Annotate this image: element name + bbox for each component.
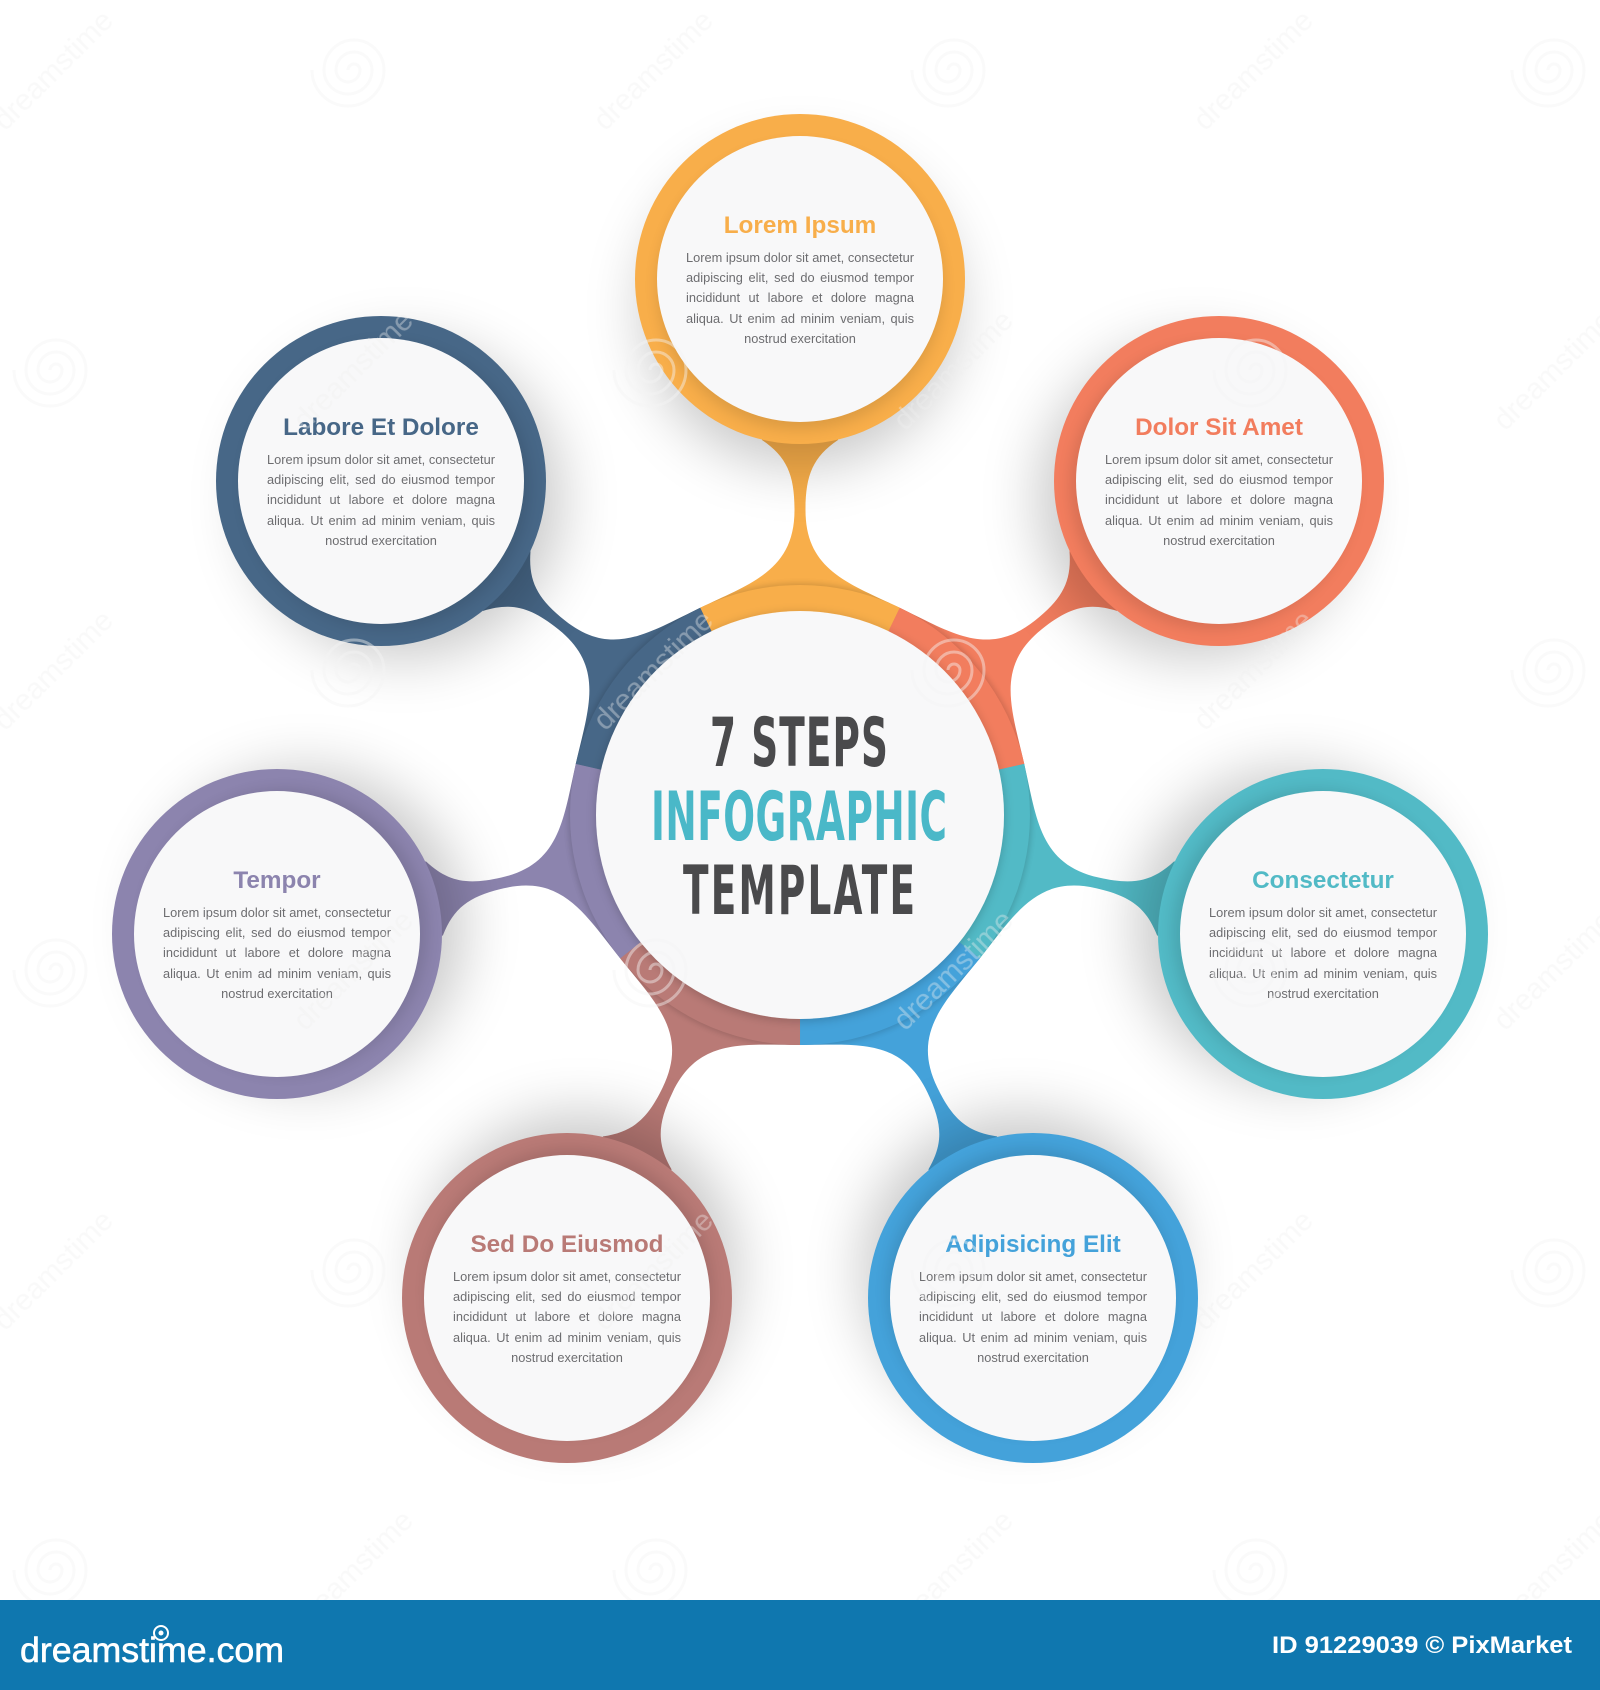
panel: Dolor Sit Amet [1054, 316, 1384, 646]
connector: blue [710, 772, 1085, 1264]
panel: Tempor [112, 769, 442, 1099]
panel: Sed Do Eiusmod [402, 1133, 732, 1463]
panel: Lorem Ipsum [635, 114, 965, 444]
watermark overlay: dreamstime [287, 904, 420, 1037]
text block: aliqua. Ut enim ad minim veniam, quis [267, 513, 495, 528]
text block: nostrud exercitation [1163, 533, 1275, 548]
text block: aliqua. Ut enim ad minim veniam, quis [453, 1330, 681, 1345]
text block [1209, 905, 1437, 1001]
text block: Lorem ipsum dolor sit amet, consectetur [267, 452, 495, 467]
heading: Labore Et Dolore [283, 414, 479, 440]
text block: adipiscing elit, sed do eiusmod tempor [267, 472, 495, 487]
watermark overlay: dreamstime [887, 1504, 1020, 1637]
watermark overlay: dreamstime [587, 4, 720, 137]
text block: adipiscing elit, sed do eiusmod tempor [163, 925, 391, 940]
text block: Lorem ipsum dolor sit amet, consectetur [919, 1269, 1147, 1284]
watermark overlay: dreamstime [587, 604, 720, 737]
heading: Tempor [233, 866, 321, 894]
text block: incididunt ut labore et dolore magna [267, 492, 495, 507]
watermark overlay: dreamstime [287, 304, 420, 437]
heading: Dolor Sit Amet [1135, 414, 1303, 440]
text block: nostrud exercitation [977, 1350, 1089, 1365]
text block [163, 905, 391, 1001]
text block: aliqua. Ut enim ad minim veniam, quis [1209, 966, 1437, 981]
text block: Lorem ipsum dolor sit amet, consectetur [453, 1269, 681, 1284]
title: 7 steps infographic template: 7 STEPS [710, 703, 888, 782]
watermark overlay: dreamstime [587, 1204, 720, 1337]
text block: adipiscing elit, sed do eiusmod tempor [453, 1289, 681, 1304]
connector: coral [738, 456, 1214, 893]
connector: rose brown [515, 772, 890, 1264]
text block: aliqua. Ut enim ad minim veniam, quis [686, 311, 914, 326]
footer logo: dreamstime.com [20, 1631, 284, 1670]
watermark overlay: dreamstime [1187, 1204, 1320, 1337]
text block: incididunt ut labore et dolore magna [919, 1309, 1147, 1324]
radial diagram: connectors and central hub [425, 440, 1175, 1170]
footer credit: ID 91229039 © PixMarket [1272, 1632, 1572, 1659]
text block: incididunt ut labore et dolore magna [453, 1309, 681, 1324]
panel: Adipisicing Elit [868, 1133, 1198, 1463]
text block [267, 452, 495, 548]
text block: incididunt ut labore et dolore magna [686, 290, 914, 305]
watermark overlay: dreamstime [1187, 604, 1320, 737]
connector: orange [700, 365, 900, 815]
text block: incididunt ut labore et dolore magna [1209, 945, 1437, 960]
heading: Sed Do Eiusmod [470, 1230, 664, 1258]
text block: Lorem ipsum dolor sit amet, consectetur [163, 905, 391, 920]
text block [686, 250, 914, 346]
central hub disc [596, 611, 1004, 1019]
text block [1105, 452, 1333, 548]
text block: incididunt ut labore et dolore magna [1105, 492, 1333, 507]
text block: incididunt ut labore et dolore magna [163, 945, 391, 960]
text block: Lorem ipsum dolor sit amet, consectetur [686, 250, 914, 265]
text block: nostrud exercitation [221, 986, 333, 1001]
text block: Lorem ipsum dolor sit amet, consectetur [1105, 452, 1333, 467]
text block: nostrud exercitation [1267, 986, 1379, 1001]
heading: Adipisicing Elit [945, 1230, 1121, 1258]
text block [919, 1269, 1147, 1365]
text block: adipiscing elit, sed do eiusmod tempor [1209, 925, 1437, 940]
watermark overlay: dreamstime [287, 1504, 420, 1637]
heading: Lorem Ipsum [724, 212, 876, 238]
text block: aliqua. Ut enim ad minim veniam, quis [163, 966, 391, 981]
panel: Labore Et Dolore [216, 316, 546, 646]
title: 7 steps infographic template: TEMPLATE [683, 851, 915, 930]
watermark overlay: dreamstime [887, 904, 1020, 1037]
connector: teal [778, 718, 1261, 1012]
connector: purple [339, 718, 822, 1012]
heading: Consectetur [1252, 866, 1394, 894]
text block: aliqua. Ut enim ad minim veniam, quis [1105, 513, 1333, 528]
title: 7 steps infographic template [651, 703, 947, 930]
watermark overlay: dreamstime [1187, 4, 1320, 137]
watermark overlay: dreamstime [887, 304, 1020, 437]
text block: adipiscing elit, sed do eiusmod tempor [686, 270, 914, 285]
text block: nostrud exercitation [744, 331, 856, 346]
text block [453, 1269, 681, 1365]
text block: Lorem ipsum dolor sit amet, consectetur [1209, 905, 1437, 920]
panel: Consectetur [1158, 769, 1488, 1099]
footer bar [0, 1600, 1600, 1690]
text block: adipiscing elit, sed do eiusmod tempor [1105, 472, 1333, 487]
connector: navy [386, 456, 862, 893]
text block: nostrud exercitation [325, 533, 437, 548]
text block: nostrud exercitation [511, 1350, 623, 1365]
text block: aliqua. Ut enim ad minim veniam, quis [919, 1330, 1147, 1345]
title: 7 steps infographic template: INFOGRAPHIC [651, 777, 947, 856]
text block: adipiscing elit, sed do eiusmod tempor [919, 1289, 1147, 1304]
